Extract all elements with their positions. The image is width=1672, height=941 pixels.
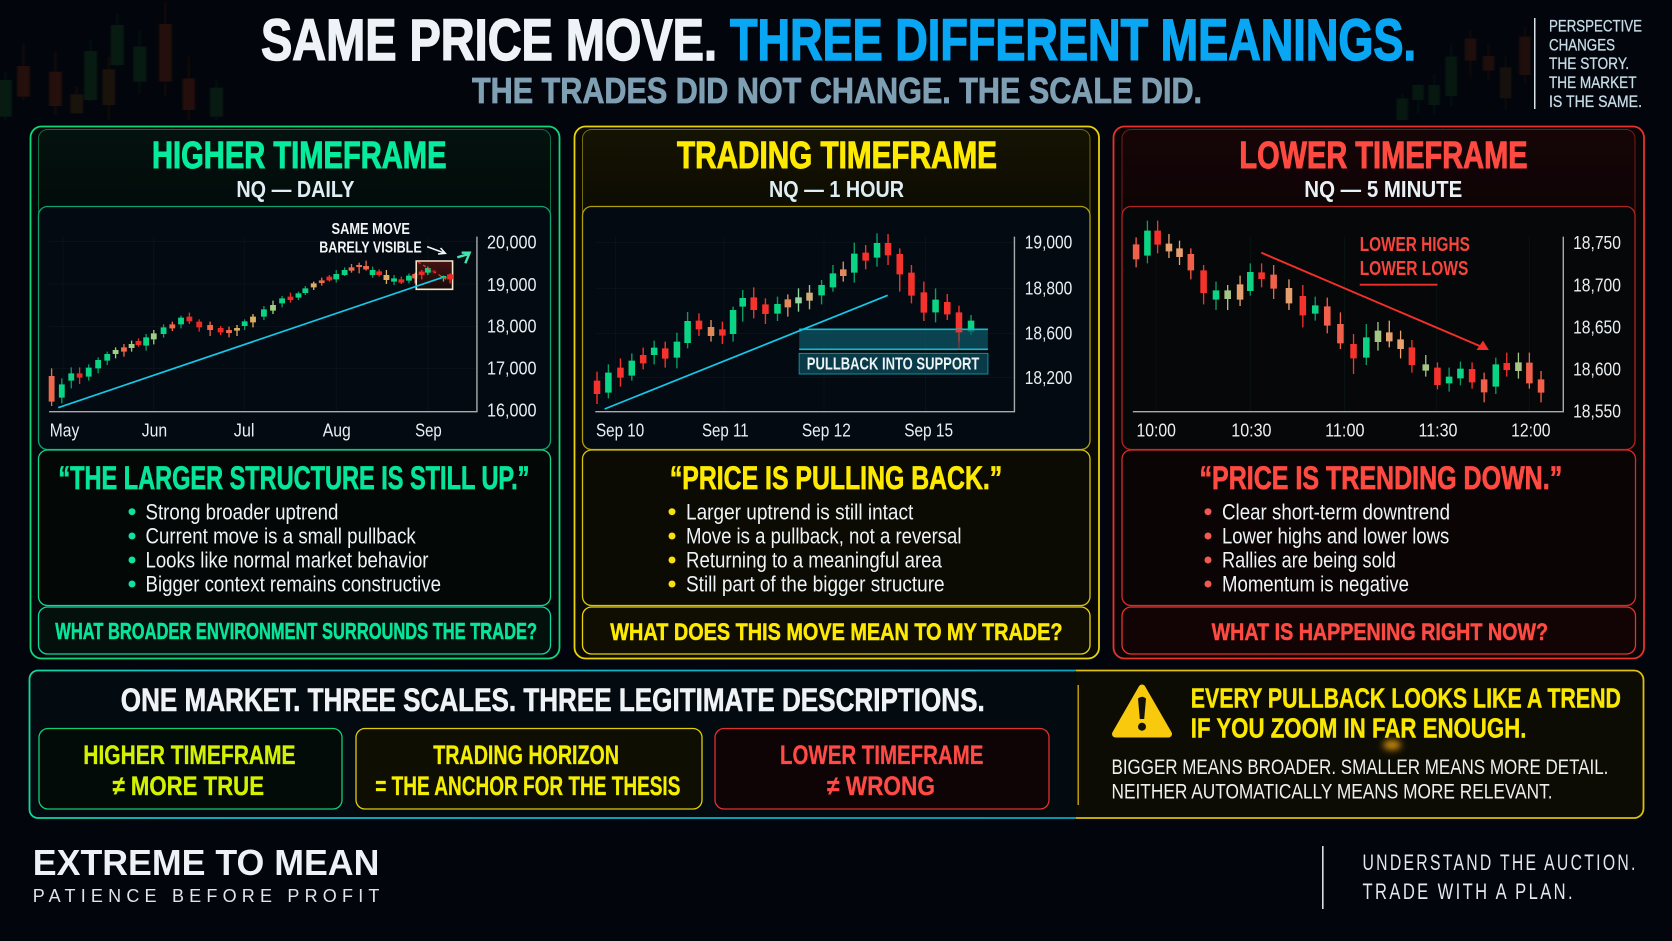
side note: perspective changes: THE STORY. xyxy=(1549,54,1629,73)
x axis labels xyxy=(50,421,442,441)
y axis labels: 16,000 xyxy=(487,400,536,420)
candlestick chart: daily xyxy=(49,237,477,412)
heading: HIGHER TIMEFRAME xyxy=(152,135,446,177)
y axis labels: 20,000 xyxy=(487,233,536,253)
x axis labels: 11:00 xyxy=(1325,421,1364,441)
question box: WHAT DOES THIS MOVE MEAN TO MY TRADE? xyxy=(610,619,1062,646)
y axis labels: 18,600 xyxy=(1025,324,1072,344)
subheading: NQ — 1 HOUR xyxy=(769,176,904,202)
callout: same move barely visible xyxy=(319,221,422,257)
y axis labels: 18,650 xyxy=(1573,318,1621,338)
bullet list: Larger uptrend is still intact xyxy=(686,499,913,524)
quote box xyxy=(582,450,1090,606)
panel: trading timeframe xyxy=(574,126,1099,658)
subheading: NQ — 5 MINUTE xyxy=(1304,176,1462,202)
y axis labels: 18,200 xyxy=(1025,368,1072,388)
chart frame xyxy=(1122,206,1635,450)
x axis labels: Sep 15 xyxy=(904,421,953,441)
question box xyxy=(38,607,550,654)
chart frame xyxy=(582,206,1090,450)
background candles top right xyxy=(1402,27,1525,120)
x axis labels: 12:00 xyxy=(1511,421,1550,441)
card: lower timeframe: LOWER TIMEFRAME xyxy=(780,740,983,770)
x axis labels: 11:30 xyxy=(1418,421,1458,441)
callout: same move barely visible: SAME MOVE xyxy=(332,221,410,238)
axes xyxy=(1133,237,1563,412)
card: trading horizon xyxy=(356,728,702,809)
y axis labels: 18,750 xyxy=(1573,233,1621,253)
y axis labels: 17,000 xyxy=(487,358,536,378)
y axis labels: 18,800 xyxy=(1025,279,1072,299)
side note: perspective changes: THE MARKET xyxy=(1549,73,1636,92)
callout: same move barely visible: BARELY VISIBLE xyxy=(319,240,422,257)
title: SAME PRICE MOVE. xyxy=(261,8,717,73)
card: higher timeframe xyxy=(39,728,342,809)
card: lower timeframe xyxy=(715,728,1049,809)
question box xyxy=(582,607,1090,654)
bullet list: Looks like normal market behavior xyxy=(146,548,428,573)
x axis labels: Sep xyxy=(415,421,442,441)
x axis labels: Jun xyxy=(142,421,167,441)
subtitle: THE TRADES DID NOT CHANGE. THE SCALE DID. xyxy=(472,70,1202,111)
x axis labels: Jul xyxy=(234,421,254,441)
footer brand: PATIENCE BEFORE PROFIT xyxy=(33,886,379,906)
y axis labels: 18,550 xyxy=(1573,402,1621,422)
callout: lower highs lower lows: LOWER HIGHS xyxy=(1360,234,1470,256)
warning heading xyxy=(1191,682,1621,744)
footer tagline xyxy=(1322,846,1638,909)
x axis labels: 10:30 xyxy=(1231,421,1272,441)
subheading: NQ — DAILY xyxy=(236,176,354,202)
footer brand: EXTREME TO MEAN xyxy=(33,842,379,883)
y axis labels: 19,000 xyxy=(1025,233,1072,253)
card: higher timeframe: ≠ MORE TRUE xyxy=(113,771,264,801)
heading: LOWER TIMEFRAME xyxy=(1239,135,1528,177)
x axis labels: Sep 12 xyxy=(802,421,851,441)
quote: “PRICE IS PULLING BACK.” xyxy=(670,460,1002,496)
arrow: downtrend xyxy=(1261,253,1481,347)
candlestick chart: 5 minute xyxy=(1133,221,1563,412)
y axis labels: 18,000 xyxy=(487,316,536,336)
x axis labels: Aug xyxy=(323,421,351,441)
bullet list: Lower highs and lower lows xyxy=(1222,524,1449,549)
bullet list: Move is a pullback, not a reversal xyxy=(686,524,962,549)
x axis labels: May xyxy=(50,421,79,441)
y axis labels xyxy=(1573,233,1621,422)
arrow: green up xyxy=(457,253,470,263)
y axis labels: 19,000 xyxy=(487,275,536,295)
bullet list xyxy=(128,499,441,597)
card: higher timeframe: HIGHER TIMEFRAME xyxy=(83,740,296,770)
y axis labels: 18,700 xyxy=(1573,275,1621,295)
side note: perspective changes xyxy=(1534,16,1642,111)
chart frame xyxy=(38,206,550,450)
warning heading: IF YOU ZOOM IN FAR ENOUGH. xyxy=(1191,713,1526,744)
bullet list xyxy=(668,499,962,597)
question box xyxy=(1122,607,1636,654)
underline xyxy=(1360,284,1437,286)
band: one market three scales xyxy=(30,670,1076,818)
panel: lower timeframe xyxy=(1114,126,1644,658)
side note: perspective changes: CHANGES xyxy=(1549,36,1615,54)
y axis labels xyxy=(1025,233,1072,388)
band heading: ONE MARKET. THREE SCALES. THREE LEGITIMATE DESCRIPTIONS. xyxy=(121,682,985,718)
axes xyxy=(595,237,1014,412)
bullet list: Returning to a meaningful area xyxy=(686,548,943,573)
background candles top left xyxy=(5,2,216,120)
bullet list: Bigger context remains constructive xyxy=(146,572,441,597)
trendline xyxy=(605,295,888,409)
support label: PULLBACK INTO SUPPORT xyxy=(807,353,980,373)
quote box xyxy=(1122,450,1636,606)
quote: “PRICE IS TRENDING DOWN.” xyxy=(1200,460,1562,496)
bullet list: Current move is a small pullback xyxy=(146,524,417,549)
panel: higher timeframe xyxy=(30,126,560,658)
callout: lower highs lower lows xyxy=(1360,234,1470,280)
bullet list xyxy=(1204,499,1450,597)
question box: WHAT BROADER ENVIRONMENT SURROUNDS THE TRADE? xyxy=(55,618,537,644)
callout: lower highs lower lows: LOWER LOWS xyxy=(1360,258,1468,280)
support zone xyxy=(799,329,988,349)
bullet list: Still part of the bigger structure xyxy=(686,572,945,597)
x axis labels xyxy=(596,421,953,441)
quote: “THE LARGER STRUCTURE IS STILL UP.” xyxy=(58,460,529,496)
title xyxy=(261,8,1416,73)
title: THREE DIFFERENT MEANINGS. xyxy=(730,8,1416,73)
x axis labels: Sep 11 xyxy=(702,421,749,441)
bullet list: Strong broader uptrend xyxy=(146,499,338,524)
bullet list: Momentum is negative xyxy=(1222,572,1409,597)
side note: perspective changes: PERSPECTIVE xyxy=(1549,16,1642,36)
warning body xyxy=(1112,756,1608,803)
arrow: same move xyxy=(427,247,445,254)
y axis labels xyxy=(487,233,536,420)
x axis labels: Sep 10 xyxy=(596,421,644,441)
card: trading horizon: TRADING HORIZON xyxy=(433,740,619,770)
axes xyxy=(49,237,477,412)
card: trading horizon: = THE ANCHOR FOR THE THESIS xyxy=(375,771,680,801)
x axis labels xyxy=(1136,421,1550,441)
footer tagline: TRADE WITH A PLAN. xyxy=(1362,879,1575,904)
bullet list: Rallies are being sold xyxy=(1222,548,1396,573)
warning body: NEITHER AUTOMATICALLY MEANS MORE RELEVANT. xyxy=(1112,780,1553,803)
card: lower timeframe: ≠ WRONG xyxy=(827,771,935,801)
y axis labels: 18,600 xyxy=(1573,359,1621,379)
bullet list: Clear short-term downtrend xyxy=(1222,499,1450,524)
trendline xyxy=(58,278,442,408)
question box: WHAT IS HAPPENING RIGHT NOW? xyxy=(1212,619,1548,646)
callout: warning xyxy=(1076,670,1644,818)
heading: TRADING TIMEFRAME xyxy=(677,135,997,177)
icon: warning triangle xyxy=(1116,688,1168,734)
quote box xyxy=(38,450,550,606)
side note: perspective changes: IS THE SAME. xyxy=(1549,92,1642,111)
candlestick chart: 1 hour xyxy=(595,233,1014,412)
support label box xyxy=(799,353,988,374)
footer brand xyxy=(33,842,379,906)
zoom box xyxy=(416,261,453,289)
x axis labels: 10:00 xyxy=(1136,421,1176,441)
